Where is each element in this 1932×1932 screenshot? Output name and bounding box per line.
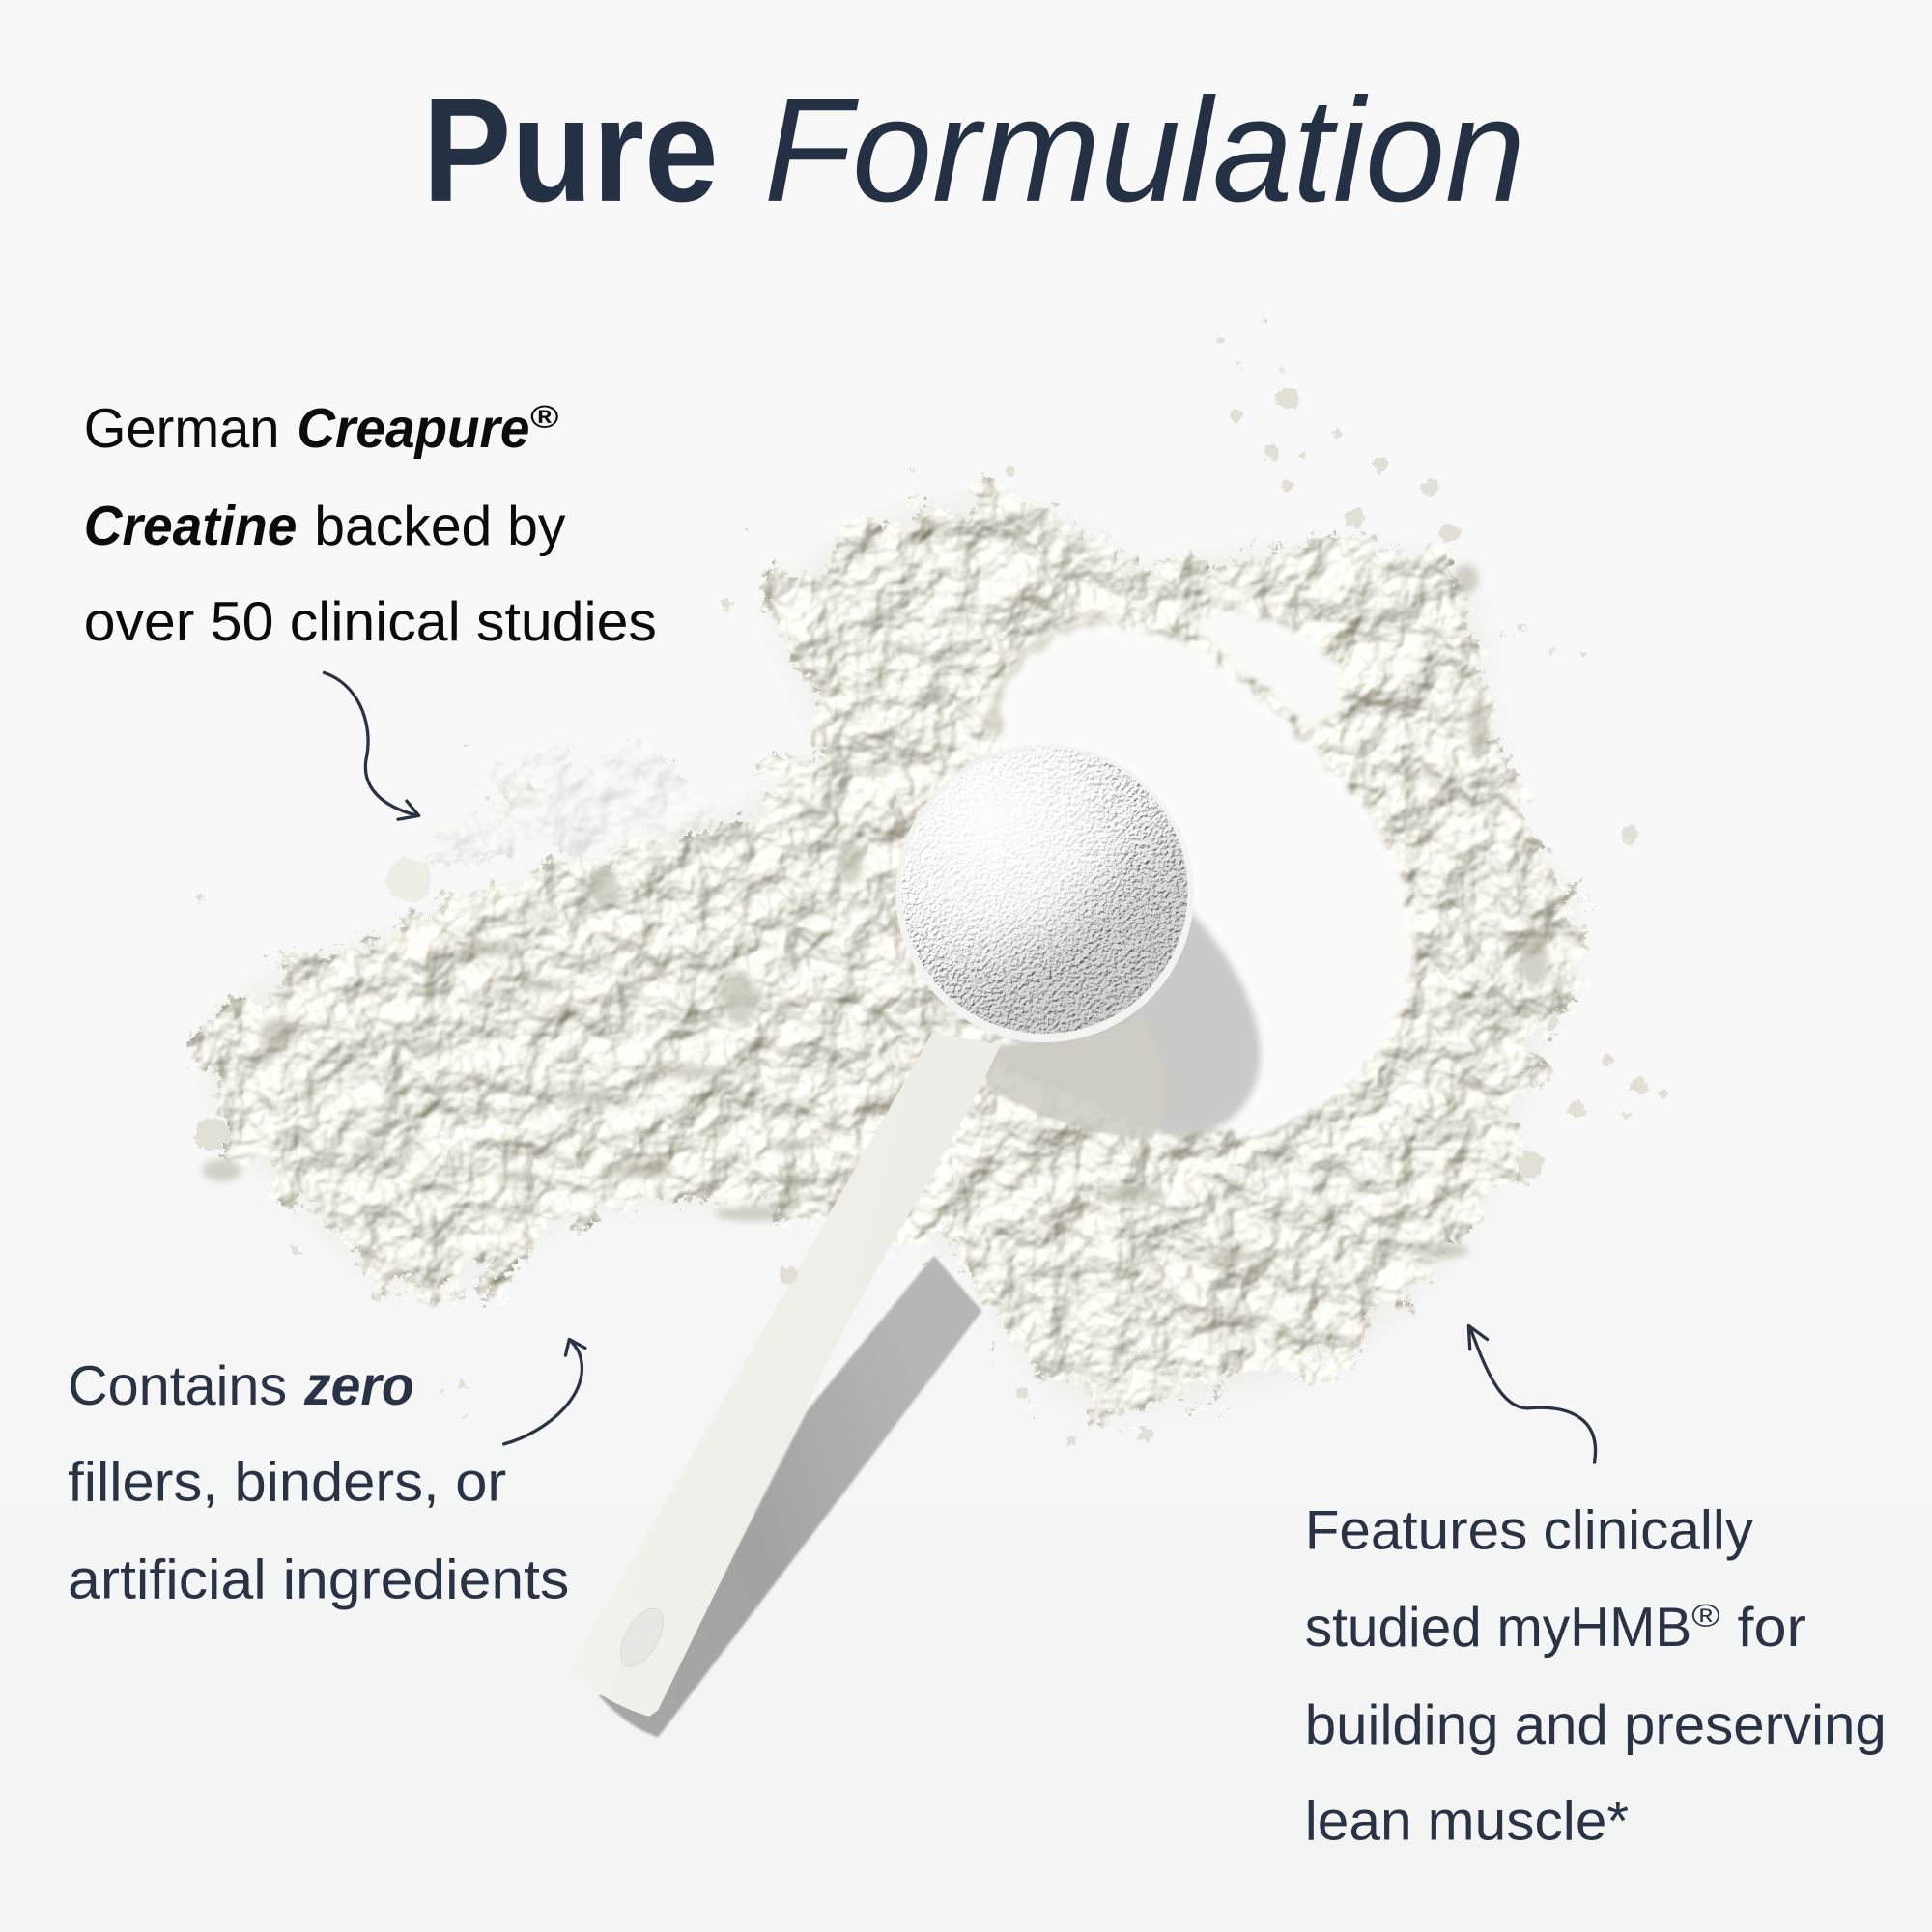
callout: myHMB: building and preserving: [1305, 1694, 1887, 1756]
scoop: [575, 744, 1194, 1717]
callout: myHMB: Features clinically: [1305, 1499, 1753, 1561]
callout: German Creapure Creatine: Creatine: [84, 496, 297, 557]
callout: German Creapure Creatine: over 50 clinical studies: [84, 591, 657, 653]
callout: myHMB: studied myHMB: [1305, 1597, 1691, 1659]
secondary powder hollow: [1189, 614, 1342, 727]
powder dust haze upper left: [438, 752, 696, 863]
callout: myHMB: [1305, 1499, 1887, 1852]
callout: zero fillers: [68, 1355, 569, 1610]
callout: myHMB: ®: [1691, 1599, 1720, 1634]
title: [423, 68, 1525, 233]
scoop cast shadow: [974, 906, 1261, 1136]
bowl highlight: [902, 748, 1188, 1034]
scoop handle: [575, 1033, 1001, 1717]
arrow: to loose powder: [324, 672, 419, 819]
callout: zero fillers: Contains: [68, 1355, 287, 1417]
handle shadow: [599, 1256, 982, 1737]
title: Pure: [423, 68, 719, 233]
callout: German Creapure Creatine: backed by: [314, 496, 566, 557]
callout: myHMB: lean muscle*: [1305, 1790, 1629, 1852]
callout: German Creapure Creatine: German: [84, 398, 280, 460]
callout: zero fillers: zero: [303, 1355, 414, 1417]
arrow: to ingredients: [504, 1339, 585, 1444]
callout: zero fillers: artificial ingredients: [68, 1548, 569, 1610]
powder crater: [1000, 628, 1413, 1132]
powder crater edge: [985, 616, 1122, 739]
powder halo: [204, 498, 1581, 1411]
powder under scoop: [985, 1016, 1165, 1140]
powder pile: [204, 498, 1581, 1411]
bowl powder: [902, 748, 1188, 1034]
callout: German Creapure Creatine: [84, 398, 657, 653]
title: Formulation: [764, 68, 1525, 233]
callout: German Creapure Creatine: ®: [529, 400, 558, 436]
pile crevice shadows: [202, 564, 1548, 1263]
arrow: to powder pile: [1468, 1325, 1596, 1463]
handle hole: [612, 1602, 671, 1673]
bowl rim: [895, 744, 1194, 1042]
callout: German Creapure Creatine: Creapure: [297, 398, 529, 460]
callout: myHMB: for: [1737, 1597, 1806, 1659]
loose powder particles: [195, 317, 1667, 1446]
callout: zero fillers: fillers, binders, or: [68, 1452, 506, 1514]
